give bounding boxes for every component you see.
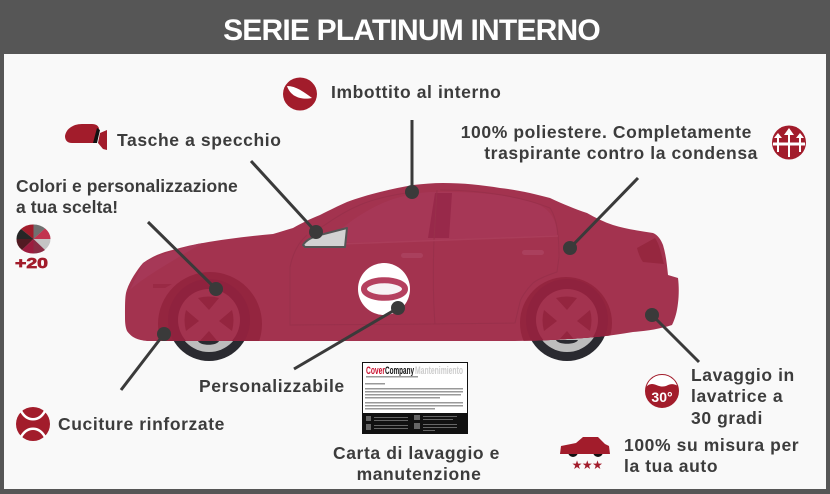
label: cuciture rinforzate: Cuciture rinforzate [58,414,225,434]
body shading and door details [130,190,664,325]
label: lavaggio in lavatrice: Lavaggio in [691,365,795,385]
icon: wash 30 degrees: 30° [651,389,673,405]
rear wheel arch and hub [520,277,612,341]
label: lavaggio in lavatrice [691,365,795,428]
label: +20: +20 [15,255,48,272]
label: tasche a specchio: Tasche a specchio [117,130,282,150]
label: su misura: la tua auto [624,456,718,476]
rear wheel tyre [526,279,608,361]
care card [362,362,468,434]
pointer: personalizzabile [294,301,405,369]
label: carta di lavaggio: Carta di lavaggio e [333,443,500,463]
icon: feather [283,78,317,110]
pointer: colori [148,222,223,296]
car body [125,183,679,341]
label: carta di lavaggio: manutenzione [357,464,481,484]
wing mirror glass [303,228,347,247]
title: SERIE PLATINUM INTERNO [223,14,600,47]
label: colori e personalizzazione [16,176,238,217]
pointer: cuciture [121,327,171,390]
label: lavaggio in lavatrice: lavatrice a [691,386,783,406]
label: personalizzabile: Personalizzabile [199,376,345,396]
icon: breathable arrows [772,126,806,160]
label: su misura: 100% su misura per [624,435,799,455]
label: su misura [624,435,799,476]
icon: stitching [16,407,50,441]
icon: wash 30 degrees [646,374,678,408]
pointer: lavaggio [645,308,699,362]
label: colori e personalizzazione: a tua scelta! [16,197,118,217]
label: colori e personalizzazione: Colori e personalizzazione [16,176,238,196]
icon: car with stars: ★★★ [572,458,602,472]
label: imbottito: Imbottito al interno [331,82,501,102]
label: carta di lavaggio [333,443,500,484]
pointer: tasche a specchio [251,161,323,239]
icon: colour wheel [16,224,51,254]
door logo [358,263,410,315]
label: poliestere: 100% poliestere. Completamente [461,122,752,142]
care card: Cover [366,365,385,377]
care card: Mantenimiento [415,365,463,377]
care card: Company [385,365,415,377]
label: poliestere: traspirante contro la condensa [484,143,758,163]
front wheel arch and hub [158,272,262,341]
front wheel tyre [168,279,250,361]
pointer: poliestere [563,178,638,255]
car illustration [125,183,679,376]
icon: car with stars [560,437,610,472]
pointer: imbottito [405,120,419,199]
icon: mirror [65,124,107,150]
label: poliestere [461,122,758,163]
label: lavaggio in lavatrice: 30 gradi [691,408,763,428]
